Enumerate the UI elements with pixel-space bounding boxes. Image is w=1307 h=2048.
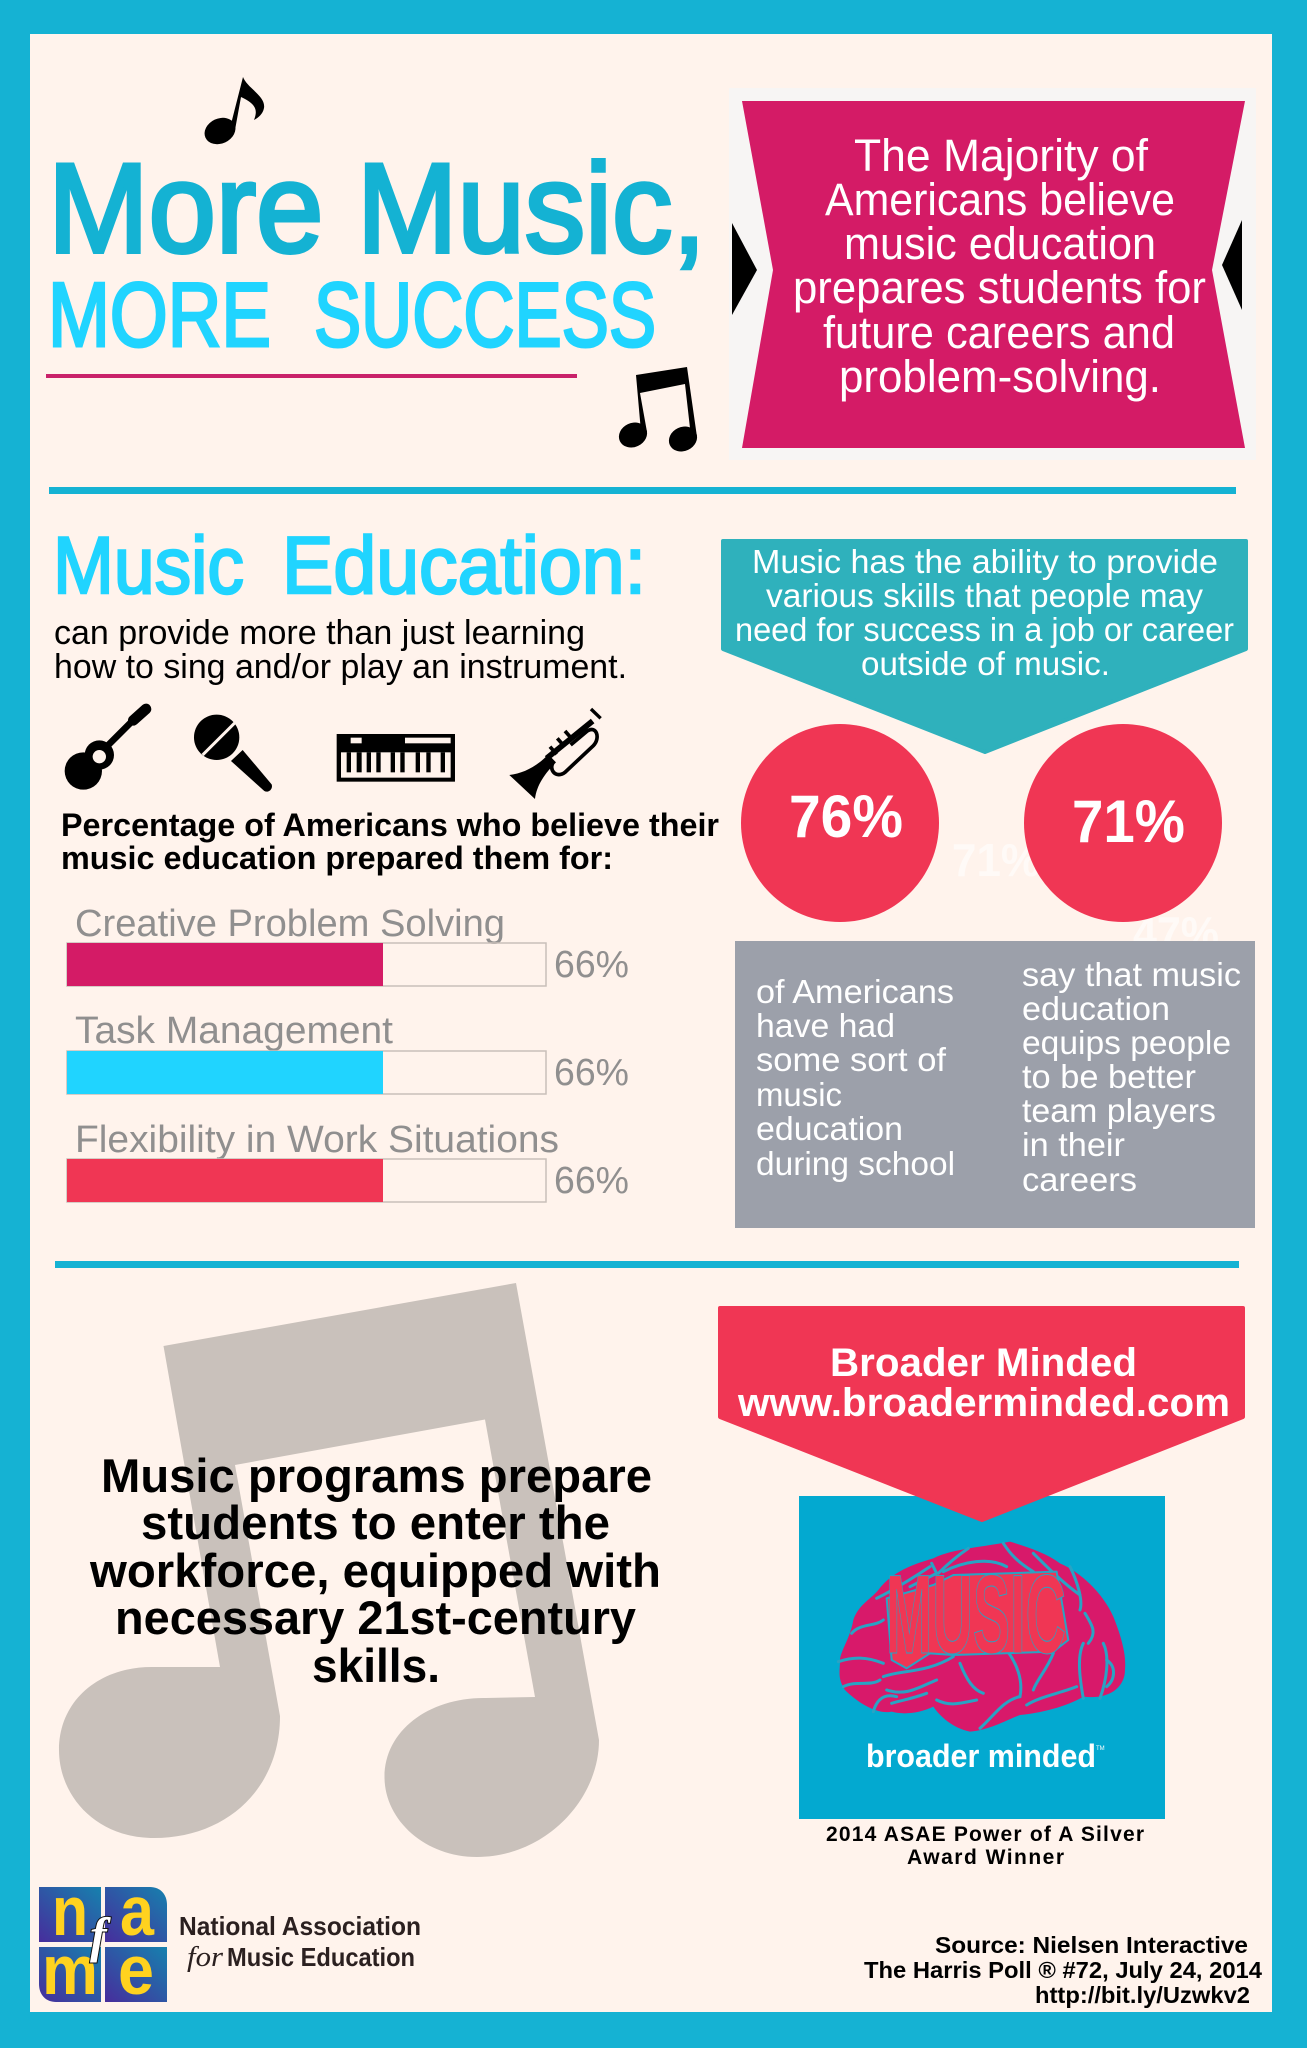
logo: NAfME: n	[52, 1872, 88, 1950]
source note	[864, 1932, 1262, 2008]
icon: double music note	[615, 367, 701, 456]
logo wordmark: for	[187, 1942, 223, 1973]
panel: broader minded logo: MUSIC	[886, 1552, 1066, 1677]
statement: music programs: workforce, equipped with	[89, 1544, 661, 1597]
title underline	[46, 374, 577, 378]
award caption: Award Winner	[907, 1846, 1064, 1869]
bar: flexibility in work situations	[67, 1119, 629, 1202]
bar: creative problem solving: Creative Problem Solving	[75, 903, 505, 945]
title line two: MORE	[48, 265, 271, 366]
statement: music programs: necessary 21st-century	[115, 1591, 636, 1644]
statement: music programs	[89, 1449, 661, 1692]
stat circle: 76%	[741, 724, 939, 922]
logo wordmark: National Association	[179, 1911, 421, 1941]
heading: music education: Education:	[282, 521, 646, 611]
logo: NAfME	[39, 1872, 167, 2009]
banner text: Americans believe	[825, 174, 1175, 225]
text: left column: some sort of	[756, 1041, 947, 1078]
banner text: music education	[844, 218, 1156, 269]
bar chart	[67, 903, 629, 1202]
icon: brain	[838, 1542, 1125, 1732]
source note: http://bit.ly/Uzwkv2	[1035, 1982, 1250, 2008]
text: left column: of Americans	[756, 973, 954, 1010]
text: left column: during school	[756, 1145, 955, 1182]
banner rim	[729, 88, 1256, 460]
stat circle: 71%: 71%	[1072, 788, 1185, 855]
bar: task management: Task Management	[75, 1010, 393, 1052]
statement: music programs: Music programs prepare	[101, 1449, 652, 1502]
source note: Source: Nielsen Interactive	[935, 1932, 1248, 1958]
chart heading: Percentage of Americans who believe their	[61, 807, 719, 843]
icon: trumpet	[509, 709, 601, 799]
text: left column	[756, 973, 955, 1182]
banner text: prepares students for	[793, 262, 1206, 313]
callout: music skills: outside of music.	[861, 645, 1110, 682]
text: left column: music	[756, 1076, 842, 1113]
intro text	[54, 614, 627, 686]
logo: NAfME: f	[90, 1907, 111, 1963]
banner right arrow	[1222, 220, 1242, 310]
callout: broader minded	[720, 1308, 1243, 1520]
bar: flexibility in work situations: Flexibility in Work Situations	[75, 1119, 559, 1161]
bar: creative problem solving: 66%	[554, 944, 629, 986]
banner text: The Majority of	[854, 130, 1148, 181]
text: trademark: TM	[1096, 1746, 1105, 1752]
logo wordmark	[179, 1911, 421, 1973]
text: right column: careers	[1022, 1161, 1137, 1198]
icon: single music note	[200, 77, 264, 149]
text: right column: to be better	[1022, 1058, 1196, 1095]
text: right column: team players	[1022, 1092, 1216, 1129]
icon: microphone	[194, 715, 272, 792]
text: broader minded wordmark: broader minded	[866, 1738, 1096, 1774]
faint ghost figures	[952, 834, 1219, 959]
text: right column: equips people	[1022, 1024, 1231, 1061]
bar: task management: 66%	[554, 1052, 629, 1094]
title line one: More Music,	[48, 137, 706, 279]
panel: majority banner	[729, 88, 1256, 460]
banner text	[793, 130, 1206, 402]
logo: NAfME: a	[120, 1872, 155, 1950]
title line two	[48, 265, 656, 366]
panel: grey stats description	[735, 941, 1255, 1228]
intro text: can provide more than just learning	[54, 614, 585, 652]
text: left column: have had	[756, 1007, 895, 1044]
faint ghost figures: 71%	[952, 834, 1040, 886]
bar: task management	[67, 1010, 629, 1094]
banner left arrow	[732, 223, 757, 315]
statement: music programs: students to enter the	[141, 1496, 610, 1549]
text: right column: in their	[1022, 1126, 1125, 1163]
banner body	[742, 101, 1245, 448]
banner text: problem-solving.	[839, 351, 1161, 402]
callout: music skills: various skills that people may	[766, 577, 1204, 614]
callout: music skills: need for success in a job or career	[735, 611, 1234, 648]
panel: broader minded logo	[799, 1496, 1165, 1819]
source note: The Harris Poll ® #72, July 24, 2014	[864, 1957, 1262, 1983]
callout: music skills	[723, 541, 1246, 752]
heading: music education: Music	[53, 521, 244, 611]
callout: broader minded: Broader Minded	[830, 1341, 1137, 1385]
chart heading: music education prepared them for:	[61, 840, 613, 876]
callout: broader minded: www.broaderminded.com	[737, 1381, 1230, 1425]
title	[48, 137, 706, 366]
intro text: how to sing and/or play an instrument.	[54, 648, 627, 686]
icon: large background music note	[59, 1283, 599, 1857]
text: right column: say that music	[1022, 956, 1241, 993]
chart heading	[61, 807, 719, 876]
heading: music education	[53, 521, 646, 611]
statement: music programs: skills.	[312, 1639, 440, 1692]
callout: music skills: Music has the ability to provide	[752, 543, 1218, 580]
text: left column: education	[756, 1110, 903, 1147]
award caption	[826, 1823, 1144, 1869]
text: right column: education	[1022, 990, 1170, 1027]
logo: NAfME: e	[118, 1931, 154, 2009]
faint ghost figures: 47%	[1133, 907, 1219, 959]
banner text: future careers and	[823, 307, 1175, 358]
icon: guitar	[65, 709, 146, 790]
stat circle: 76%: 76%	[789, 783, 903, 850]
bar: flexibility in work situations: 66%	[554, 1160, 629, 1202]
logo: NAfME: m	[42, 1931, 98, 2009]
logo wordmark: Music Education	[227, 1942, 415, 1972]
stat circle: 71%	[1024, 724, 1222, 922]
icon: keyboard	[337, 734, 455, 782]
title line two: SUCCESS	[314, 265, 656, 366]
award caption: 2014 ASAE Power of A Silver	[826, 1823, 1144, 1846]
text: right column	[1022, 956, 1241, 1198]
bar: creative problem solving	[67, 903, 629, 986]
